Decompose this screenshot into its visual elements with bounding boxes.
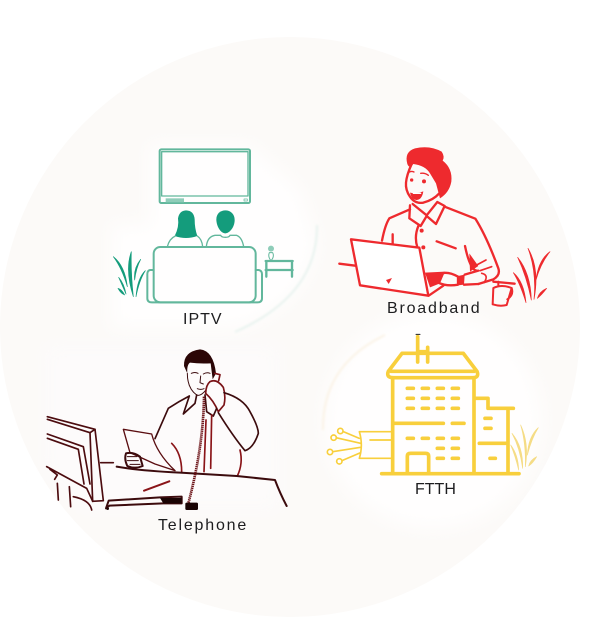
- illustration: Broadband: [339, 147, 550, 306]
- icon: roof: [388, 353, 478, 378]
- icon: hand and desk: [339, 264, 515, 296]
- icon: laptop logo: [386, 278, 392, 284]
- icon: hair: [407, 147, 451, 198]
- icon: head with hair: [184, 349, 216, 395]
- icon: grass: [511, 425, 538, 470]
- icon: face: [406, 164, 439, 203]
- icon: side table and vase: [266, 246, 293, 277]
- label: Telephone: Telephone: [158, 517, 248, 534]
- icon: phone hand: [206, 373, 225, 412]
- label: Broadband: Broadband: [387, 300, 482, 317]
- icon: television: [160, 149, 250, 203]
- icon: antenna: [416, 334, 428, 362]
- icon: mug: [493, 282, 512, 306]
- icon: sofa: [147, 247, 262, 302]
- label: IPTV: IPTV: [183, 311, 223, 328]
- icon: telephone cord and base: [185, 397, 204, 510]
- icon: annex building: [475, 398, 513, 473]
- glow: telephone: [45, 345, 280, 510]
- icon: computer monitor: [47, 417, 113, 510]
- icon: paper and hand: [123, 429, 175, 471]
- icon: shirt: [382, 202, 499, 284]
- illustration: Telephone: [47, 349, 287, 510]
- glow: FTTH: [323, 312, 541, 528]
- icon: grass: [513, 248, 550, 303]
- icon: grass: [113, 252, 145, 297]
- icon: laptop: [351, 239, 428, 296]
- glow: IPTV: [112, 145, 317, 332]
- illustration: FTTH: [327, 334, 538, 474]
- icon: fiber optic cable: [327, 428, 391, 464]
- icon: two viewers: [167, 210, 244, 247]
- icon: shirt: [155, 393, 258, 476]
- illustration: IPTV: [113, 149, 293, 302]
- label: FTTH: FTTH: [415, 481, 456, 498]
- icon: main building: [382, 378, 519, 474]
- icon: desk: [106, 467, 287, 510]
